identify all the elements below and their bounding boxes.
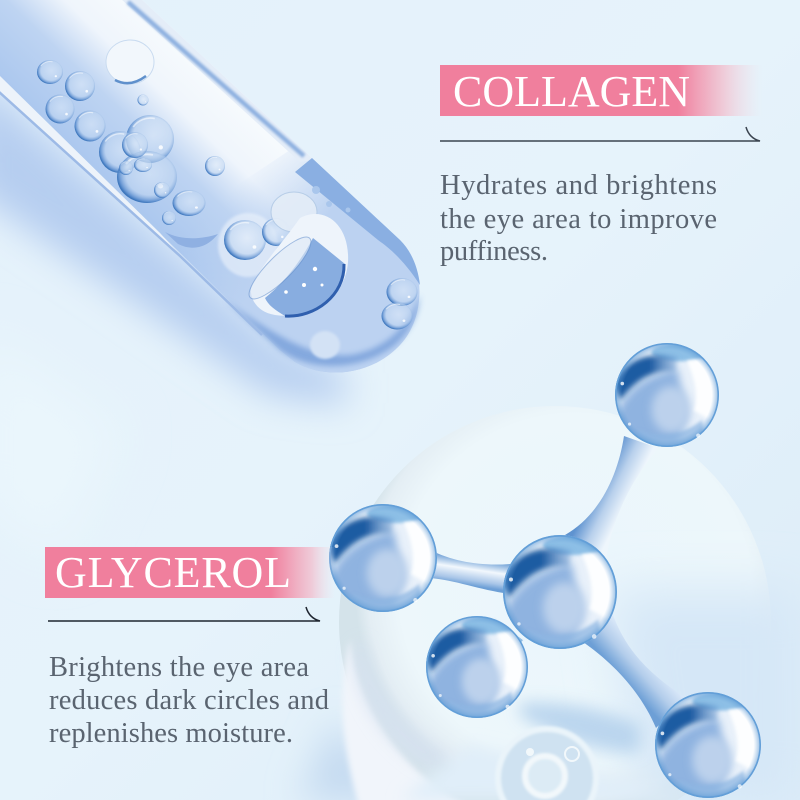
tube upper wall bbox=[120, 0, 314, 162]
text: glycerol description bbox=[49, 652, 329, 749]
icon: test tube with bubbles bbox=[0, 0, 420, 373]
text: collagen description bbox=[440, 170, 717, 267]
tube liquid end bbox=[160, 150, 420, 373]
bond: small ball bbox=[490, 618, 524, 655]
heading: glycerol: GLYCEROL bbox=[55, 548, 291, 597]
text: collagen description: Hydrates and brightens bbox=[440, 170, 717, 201]
tube tip shading bbox=[225, 295, 420, 366]
ball: lower small bbox=[423, 616, 532, 723]
text: glycerol description: Brightens the eye area bbox=[49, 652, 309, 683]
divider arrow: glycerol bbox=[48, 607, 320, 621]
bubble cluster small bbox=[37, 60, 225, 225]
ball: left bbox=[326, 504, 441, 617]
molecule bbox=[326, 343, 765, 800]
large pale sphere behind molecule bbox=[300, 406, 800, 800]
ball: bottom right bbox=[652, 692, 765, 800]
tube lower wall bbox=[0, 74, 180, 255]
bond: left bbox=[430, 550, 510, 594]
text: collagen description: the eye area to improve bbox=[440, 204, 717, 235]
tube shadow bbox=[0, 70, 345, 560]
liquid meniscus bbox=[165, 232, 218, 248]
heading: collagen: COLLAGEN bbox=[453, 67, 690, 116]
text: collagen description: puffiness. bbox=[440, 236, 548, 267]
bubble cluster centre bbox=[99, 115, 177, 203]
tube body bbox=[0, 0, 420, 373]
big bubbles bbox=[218, 192, 348, 316]
bond: top bbox=[565, 436, 658, 560]
tube blue side band bbox=[295, 158, 420, 285]
large pale bubble bbox=[106, 40, 154, 84]
ball: top bbox=[612, 343, 723, 452]
tip bubbles bbox=[310, 186, 418, 359]
text: glycerol description: reduces dark circles and bbox=[49, 685, 329, 716]
divider arrow: collagen bbox=[440, 127, 760, 141]
text: glycerol description: replenishes moisture. bbox=[49, 718, 293, 749]
tube upper wall line bbox=[128, 2, 304, 156]
tube lower wall line bbox=[0, 91, 262, 335]
droplet bubble bottom bbox=[498, 729, 596, 800]
bond: lower right bbox=[580, 612, 686, 728]
ball: centre bbox=[500, 535, 622, 655]
